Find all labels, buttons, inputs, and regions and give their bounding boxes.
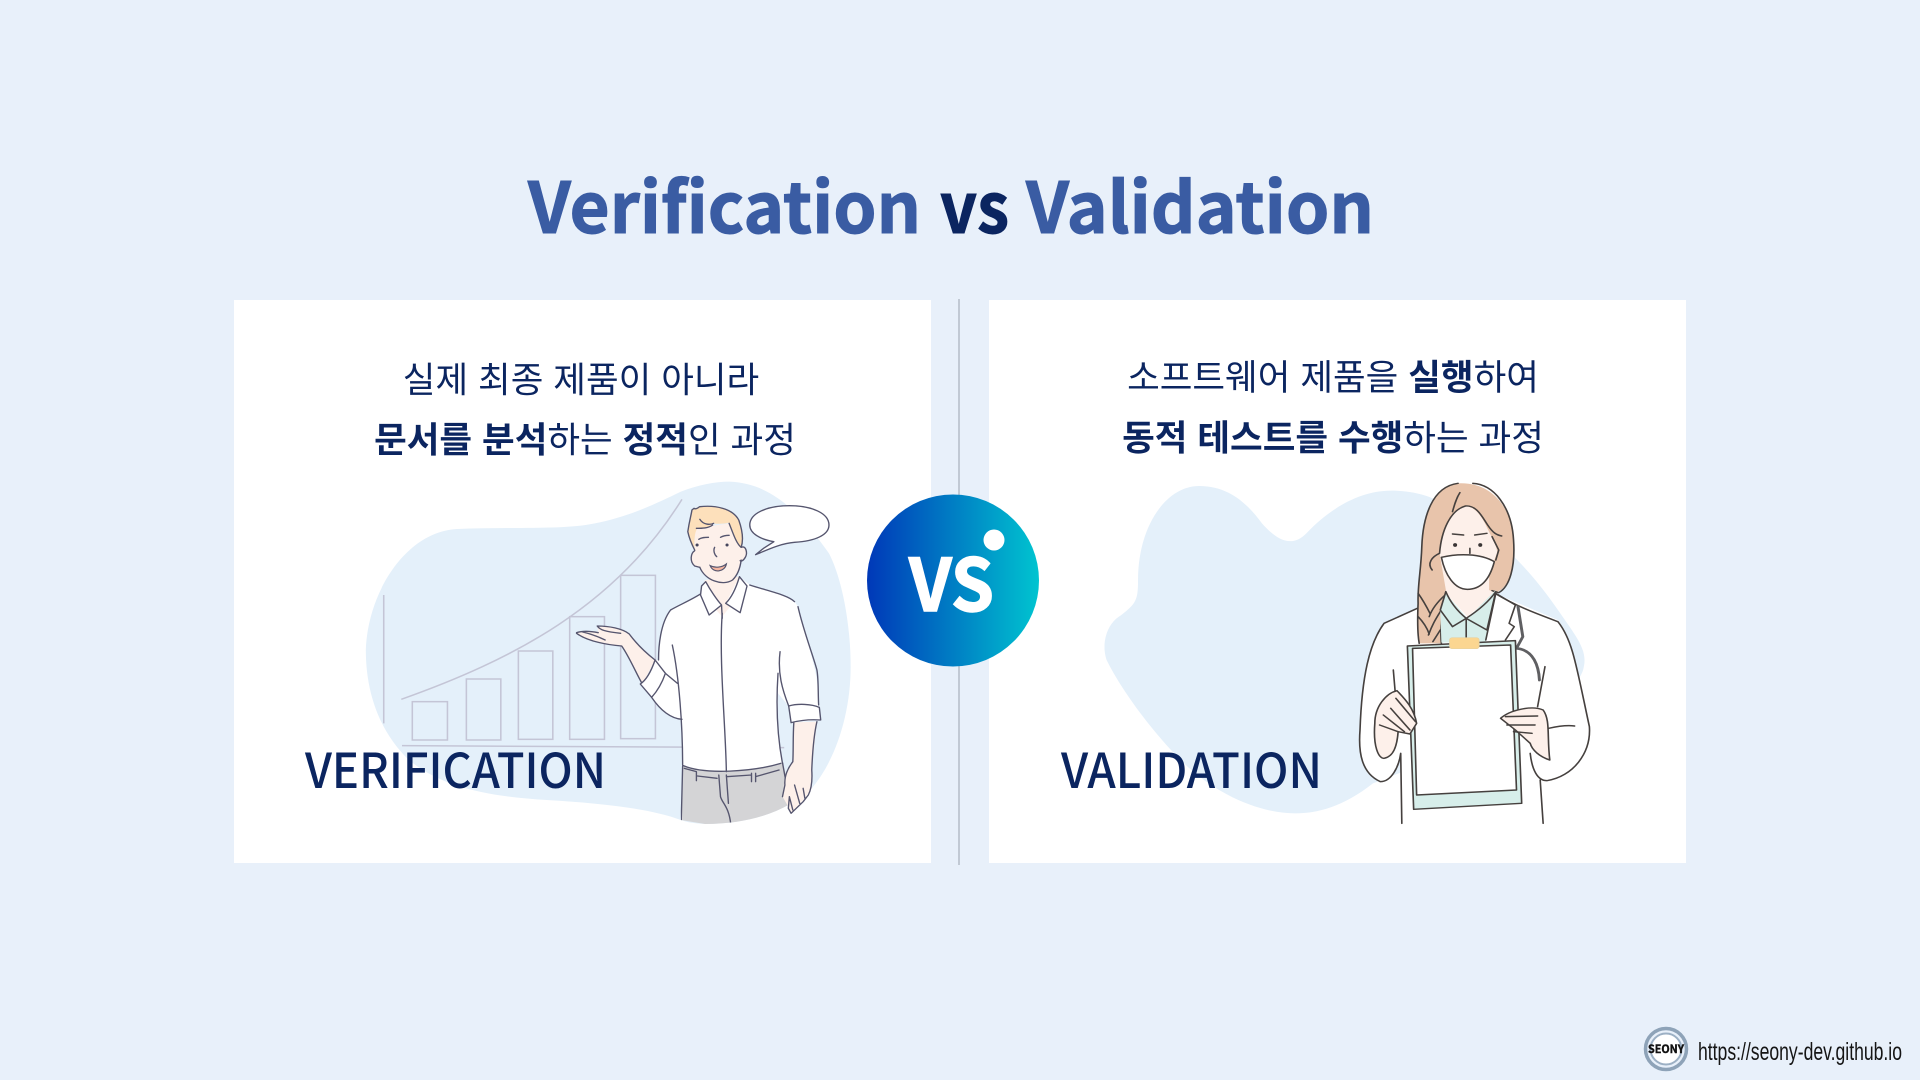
coat — [1360, 593, 1589, 823]
doctor figure — [1360, 483, 1590, 823]
shirt — [652, 577, 819, 771]
title: Validation — [1025, 153, 1374, 254]
trousers — [682, 764, 788, 824]
speech bubble — [750, 506, 829, 555]
title: vs — [940, 153, 1009, 254]
shirt outline — [652, 585, 819, 772]
panel: validation — [989, 300, 1686, 863]
panel: verification — [234, 300, 931, 863]
forearm and open hand — [577, 626, 655, 684]
neck — [701, 577, 746, 617]
divider line — [958, 299, 960, 865]
right hand and arm — [1501, 708, 1550, 760]
vs text: VS — [908, 527, 994, 632]
collar — [701, 577, 747, 615]
mouth — [710, 564, 726, 571]
badge dot — [984, 530, 1004, 550]
background blob — [1104, 486, 1585, 813]
clipboard clip — [1450, 638, 1479, 649]
face — [691, 523, 743, 583]
man figure — [577, 506, 829, 827]
footer logo — [1646, 1028, 1686, 1070]
validation description, second line: 동적 테스트를 수행하는 과정 — [1122, 410, 1544, 461]
hair — [688, 506, 743, 550]
eyes, brows, nose — [1453, 543, 1457, 547]
sleeve cuffs — [640, 660, 665, 697]
verification description, second line: 문서를 분석하는 정적인 과정 — [374, 412, 796, 463]
coat lapel — [1496, 593, 1515, 640]
left hand and arm — [1374, 691, 1417, 758]
clipboard paper — [1413, 645, 1517, 795]
verification description: 실제 최종 제품이 아니라 — [403, 352, 759, 403]
illustration: doctor with clipboard — [1104, 483, 1590, 823]
title: Verification — [527, 153, 921, 254]
hair — [1418, 483, 1514, 643]
face — [1440, 506, 1497, 617]
validation label: VALIDATION — [1060, 732, 1322, 802]
vs badge — [867, 494, 1039, 666]
title — [527, 153, 1374, 254]
eyes, brows, nose — [696, 543, 699, 546]
background blob — [366, 482, 851, 824]
footer logo: SEONY — [1648, 1041, 1685, 1057]
stethoscope — [1517, 607, 1539, 680]
ears — [691, 551, 700, 567]
bar chart — [384, 499, 784, 748]
verification label: VERIFICATION — [304, 732, 606, 802]
clipboard — [1407, 641, 1522, 809]
validation description: 소프트웨어 제품을 실행하여 — [1127, 350, 1539, 400]
lower arm and hand — [782, 722, 817, 813]
mask — [1441, 555, 1494, 589]
shirt — [1440, 590, 1496, 643]
illustration: man presenting chart — [366, 482, 851, 827]
